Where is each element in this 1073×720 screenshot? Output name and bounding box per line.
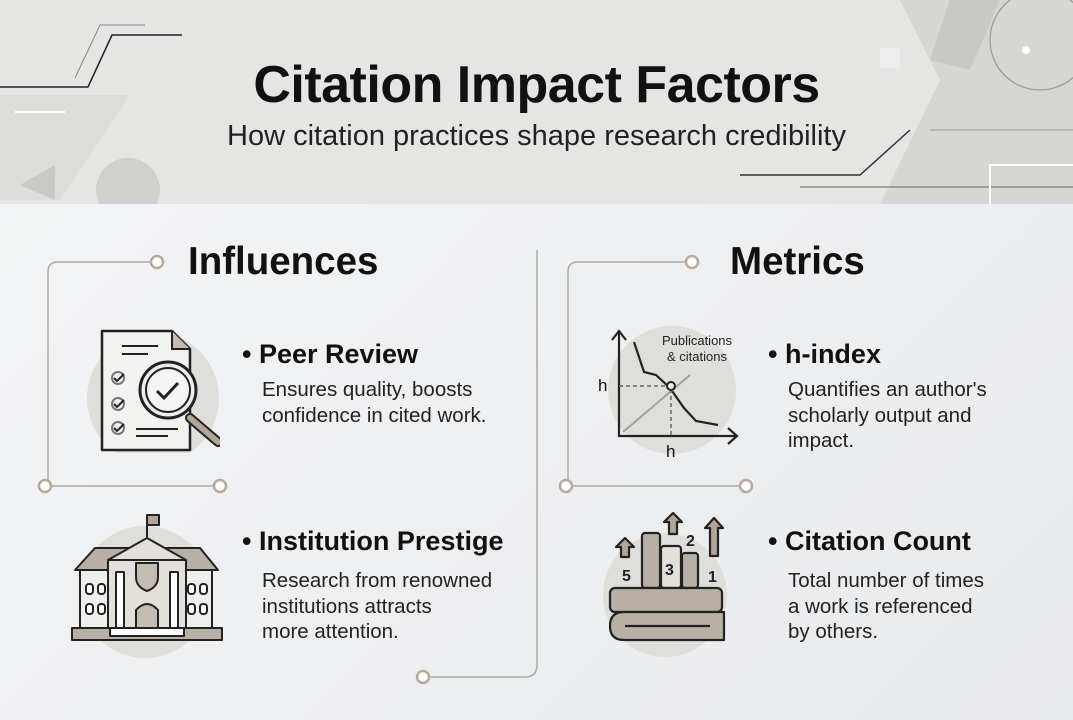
icon: citation count books: 5 <box>622 568 631 585</box>
item: Institution Prestige: • Institution Prestige <box>242 526 503 556</box>
item: Institution Prestige <box>242 526 503 643</box>
heading: Influences: Influences <box>188 240 378 283</box>
item: Citation Count: Total number of times <box>788 569 984 592</box>
icon: citation count books: 1 <box>708 569 717 586</box>
icon: institution <box>71 514 223 658</box>
item: h-index: Quantifies an author's <box>788 378 987 401</box>
item: Citation Count: by others. <box>788 620 878 643</box>
heading: Metrics: Metrics <box>730 240 865 283</box>
item: h-index: • h-index <box>768 339 881 369</box>
item: h-index: impact. <box>788 429 854 452</box>
item: Institution Prestige: more attention. <box>262 620 399 643</box>
icon: h-index chart: & citations <box>667 349 727 364</box>
item: Peer Review: confidence in cited work. <box>262 404 486 426</box>
item: Peer Review: • Peer Review <box>242 339 418 369</box>
item: Institution Prestige: Research from renowned <box>262 569 492 592</box>
icon: citation count books: 2 <box>686 533 695 550</box>
icon: h-index chart <box>598 326 739 461</box>
item: h-index <box>768 339 987 452</box>
subtitle: How citation practices shape research credibility <box>227 120 846 152</box>
item: Peer Review <box>242 339 486 426</box>
title: Citation Impact Factors <box>253 56 820 114</box>
icon: peer review <box>87 330 220 453</box>
icon: citation count books <box>603 512 727 657</box>
icon: h-index chart: h <box>598 376 607 395</box>
item: Citation Count <box>768 526 984 643</box>
item: h-index: scholarly output and <box>788 404 971 426</box>
icon: citation count books: 3 <box>665 562 674 579</box>
icon: h-index chart: Publications <box>662 333 733 348</box>
header band <box>0 0 1073 204</box>
icon: h-index chart: h <box>666 442 675 461</box>
item: Citation Count: • Citation Count <box>768 526 971 556</box>
item: Peer Review: Ensures quality, boosts <box>262 378 472 401</box>
item: Citation Count: a work is referenced <box>788 594 973 618</box>
item: Institution Prestige: institutions attracts <box>262 594 432 618</box>
